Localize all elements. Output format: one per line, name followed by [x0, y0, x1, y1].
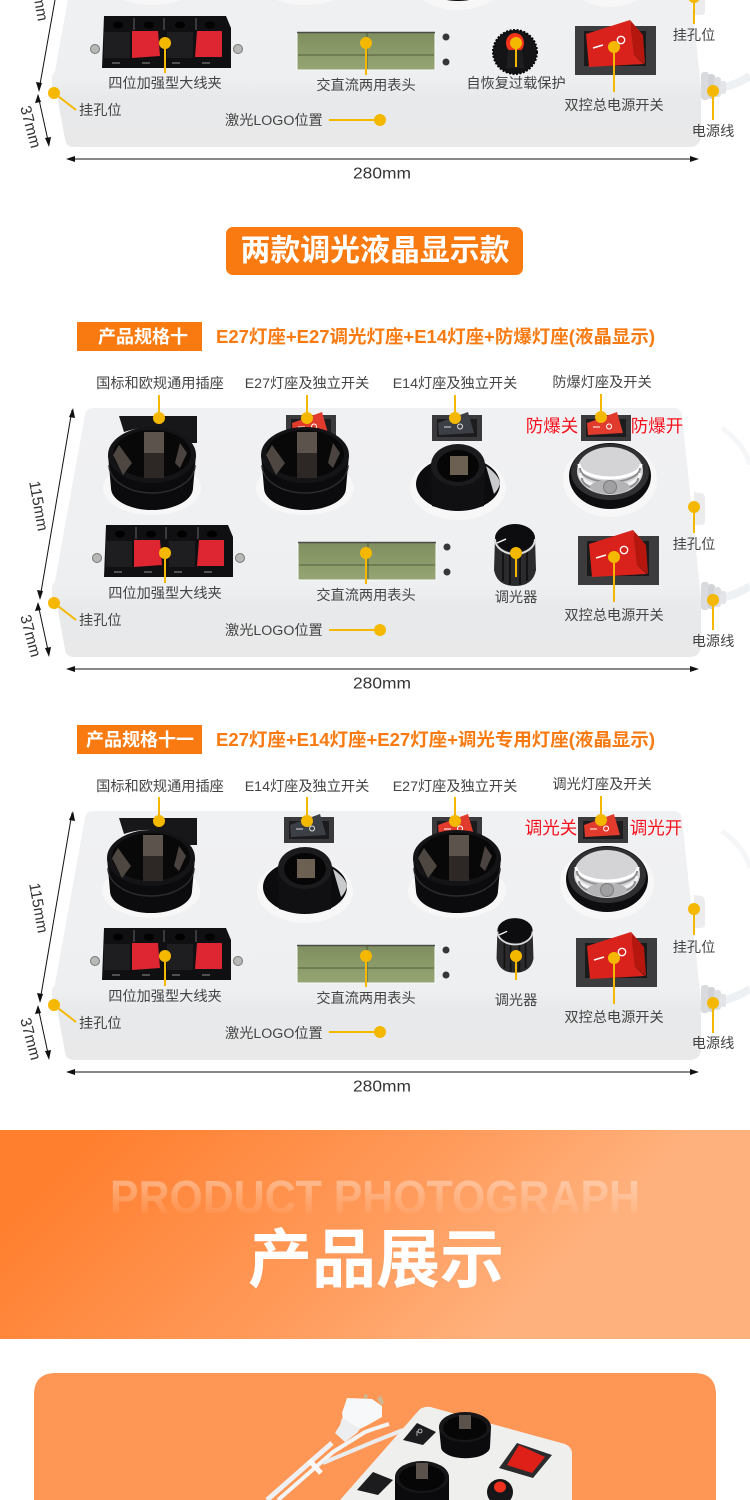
callout: dimmer lamp: 调光灯座及开关 — [552, 777, 652, 793]
callout: master switch — [564, 952, 664, 1026]
callout: left hook hole: 挂孔位 — [79, 103, 122, 119]
section button: 两款调光液晶显示款 — [240, 234, 510, 268]
dimension: width: 280mm — [353, 166, 411, 182]
callout: right hook — [673, 501, 715, 553]
dimension: depth — [16, 811, 75, 1062]
dimension: width — [66, 666, 699, 692]
callout: right hook hole: 挂孔位 — [673, 28, 715, 44]
callout: master switch: 双控总电源开关 — [564, 608, 664, 624]
icon: explosion-proof switch — [581, 412, 631, 441]
heading: specification 11 — [77, 725, 655, 754]
callout: universal socket — [96, 376, 224, 424]
callout: laser logo: 激光LOGO位置 — [225, 112, 323, 129]
callout: right hook: 挂孔位 — [673, 940, 715, 956]
dimension: depth: 37mm — [16, 613, 44, 659]
device photo — [340, 1407, 572, 1500]
callout: overload protection: 自恢复过载保护 — [466, 75, 566, 92]
callout: meter — [316, 37, 416, 94]
icon: universal socket plate — [119, 818, 197, 845]
icon: plug and cable — [267, 1394, 403, 1500]
dimension: depth — [16, 0, 55, 150]
dimension: width: 280mm — [353, 1078, 411, 1096]
icon: red switch — [286, 412, 336, 441]
dimension: depth: 37mm — [16, 104, 44, 150]
callout: E27 — [245, 376, 369, 424]
icon: E27 socket — [102, 830, 200, 918]
callout: right hook hole — [673, 0, 715, 44]
callout: left hook hole — [48, 87, 122, 119]
callout: E14: E14灯座及独立开关 — [393, 376, 517, 392]
callout: power cord: 电源线 — [692, 124, 734, 140]
callout: dimmer — [495, 950, 537, 1009]
heading: specification 10: 产品规格十 — [98, 327, 188, 347]
callout: laser logo — [225, 1025, 386, 1042]
icon: dimmer switch — [578, 814, 628, 843]
section button — [226, 227, 523, 275]
red note: off: 调光关 — [525, 818, 577, 838]
dimension: width: 280mm — [353, 676, 411, 692]
callout: power cord: 电源线 — [692, 634, 734, 650]
device board — [52, 408, 750, 657]
icon: terminal — [92, 525, 244, 577]
callout: master switch — [564, 41, 664, 114]
red note: off: 防爆关 — [526, 416, 578, 436]
panel: specification 11 — [16, 777, 750, 1096]
icon: dimmer knob — [494, 524, 536, 586]
icon: E27 socket 2 — [408, 830, 506, 918]
icon: LCD meter — [297, 32, 450, 70]
callout: master switch — [564, 551, 664, 624]
callout: meter: 交直流两用表头 — [316, 990, 416, 1007]
callout: E14 — [245, 779, 369, 827]
callout: E14: E14灯座及独立开关 — [245, 779, 369, 795]
icon: master rocker switch — [575, 20, 656, 75]
banner: product photograph — [0, 1130, 750, 1339]
panel: top specification (cropped) — [16, 0, 750, 182]
icon: LCD meter — [298, 542, 450, 580]
heading: specification 11: 产品规格十一 — [86, 730, 194, 750]
heading: specification 11: E27灯座+E14灯座+E27灯座+调光专用灯座(液晶显示) — [216, 729, 655, 750]
callout: explosion proof — [552, 375, 652, 423]
callout: laser logo: 激光LOGO位置 — [225, 622, 323, 639]
dimension: depth: 115mm — [25, 480, 51, 532]
device board — [52, 811, 750, 1060]
icon: reset overload button — [493, 30, 537, 74]
callout: master switch: 双控总电源开关 — [564, 98, 664, 114]
icon: red switch — [432, 814, 482, 843]
icon: dimmer knob — [497, 918, 533, 973]
callout: E27 — [393, 779, 517, 827]
heading: specification 10 — [77, 322, 655, 351]
icon: dark switch — [432, 412, 482, 441]
callout: E14 — [393, 376, 517, 424]
callout: power cord — [692, 85, 734, 140]
callout: overload protection — [466, 37, 566, 92]
callout: power cord: 电源线 — [692, 1036, 734, 1052]
red note: on: 防爆开 — [631, 416, 683, 436]
callout: laser logo: 激光LOGO位置 — [225, 1025, 323, 1042]
callout: meter — [316, 547, 416, 604]
icon: lamp holder — [560, 846, 654, 920]
banner: product photograph: PRODUCT PHOTOGRAPH — [110, 1171, 640, 1223]
icon: universal socket plate — [119, 416, 197, 443]
callout: power cord — [692, 997, 734, 1052]
callout: terminal: 四位加强型大线夹 — [108, 76, 222, 92]
callout: universal socket — [96, 779, 224, 827]
dimension: depth: 115mm — [25, 882, 51, 934]
callout: left hook: 挂孔位 — [79, 1016, 122, 1032]
icon: lamp holder — [563, 443, 657, 517]
callout: dimmer — [495, 547, 537, 606]
dimension: depth — [16, 408, 75, 659]
callout: right hook: 挂孔位 — [673, 537, 715, 553]
callout: meter — [316, 950, 416, 1007]
icon: terminal — [90, 928, 242, 980]
dimension: width — [66, 1069, 699, 1096]
heading: specification 10: E27灯座+E27调光灯座+E14灯座+防爆灯座(液晶显示) — [216, 326, 655, 347]
callout: power cord — [692, 594, 734, 650]
callout: explosion proof: 防爆灯座及开关 — [552, 375, 652, 391]
callout: laser logo — [225, 622, 386, 639]
callout: universal socket: 国标和欧规通用插座 — [96, 376, 224, 392]
callout: universal socket: 国标和欧规通用插座 — [96, 779, 224, 795]
callout: left hook: 挂孔位 — [79, 613, 122, 629]
callout: dimmer lamp — [552, 777, 652, 826]
callout: meter: 交直流两用表头 — [316, 587, 416, 604]
dimension: width — [66, 156, 699, 182]
device board — [52, 0, 750, 147]
icon: E14 socket — [410, 444, 506, 520]
callout: terminal: 四位加强型大线夹 — [108, 586, 222, 602]
panel: specification 10 — [16, 375, 750, 692]
callout: dimmer: 调光器 — [495, 590, 537, 606]
panel: product photo card — [34, 1373, 716, 1500]
callout: terminal — [108, 547, 222, 602]
icon: E27 socket — [103, 427, 201, 515]
icon: master rocker — [576, 932, 657, 987]
callout: terminal: 四位加强型大线夹 — [108, 989, 222, 1005]
callout: right hook — [673, 903, 715, 956]
callout: E27: E27灯座及独立开关 — [245, 376, 369, 392]
dimension: depth: 37mm — [16, 1016, 44, 1062]
banner: product photograph: 产品展示 — [248, 1224, 504, 1296]
icon: dark switch — [284, 814, 334, 843]
callout: meter: 交直流两用表头 — [316, 77, 416, 94]
callout: master switch: 双控总电源开关 — [564, 1010, 664, 1026]
callout: terminal — [108, 950, 222, 1005]
red note: on: 调光开 — [630, 818, 682, 838]
icon: E14 socket — [257, 847, 353, 923]
callout: terminal — [108, 37, 222, 92]
icon: four-position terminal — [90, 16, 242, 68]
icon: E27 socket 2 — [256, 427, 354, 515]
icon: master rocker — [578, 530, 659, 585]
callout: laser logo — [225, 112, 386, 129]
callout: E27: E27灯座及独立开关 — [393, 779, 517, 795]
callout: dimmer: 调光器 — [495, 993, 537, 1009]
icon: LCD meter — [297, 945, 450, 983]
callout: left hook — [48, 597, 122, 629]
callout: left hook — [48, 999, 122, 1032]
